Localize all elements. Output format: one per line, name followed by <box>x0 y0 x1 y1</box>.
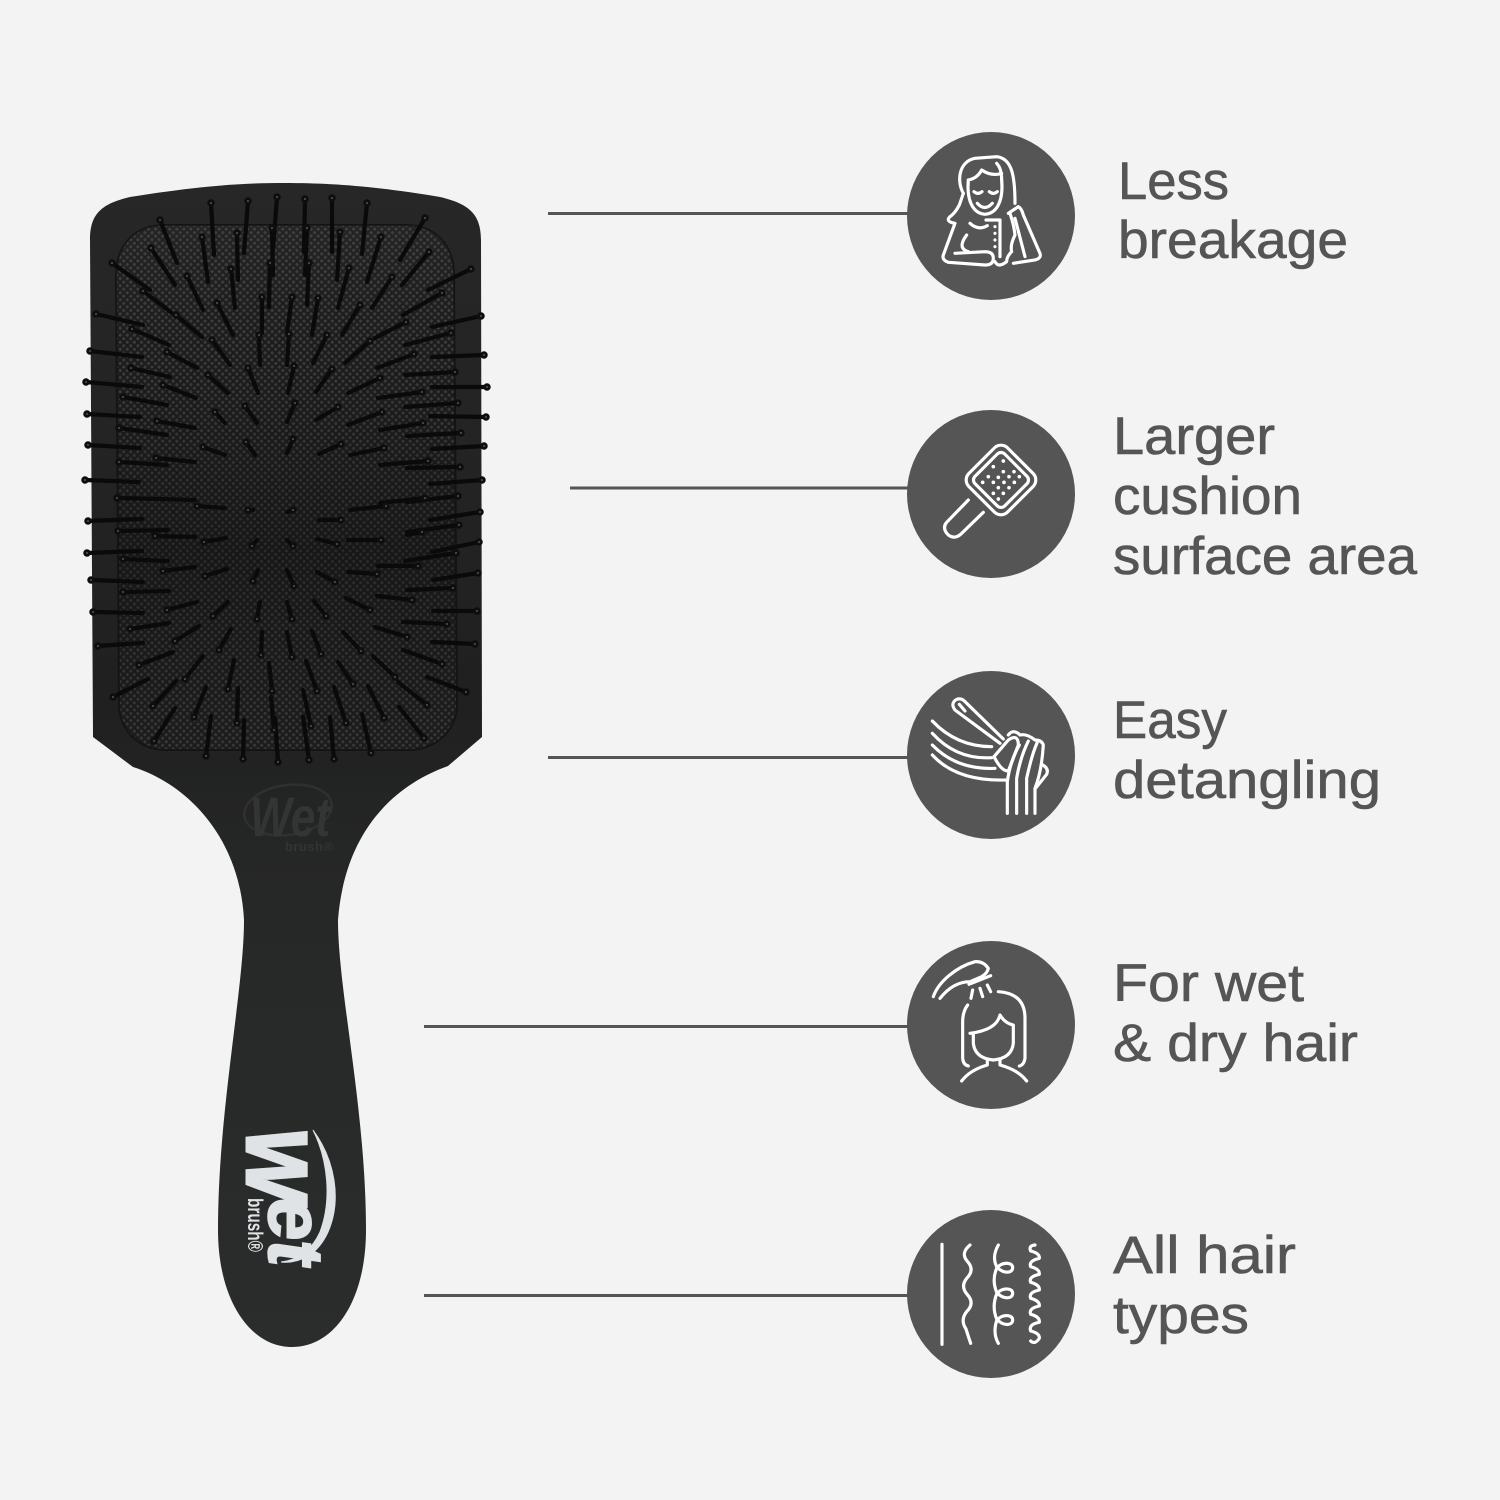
badge icon: paddle brush <box>907 410 1075 578</box>
feature: easy detangling <box>907 671 1381 839</box>
label: Larger <box>1113 407 1275 466</box>
label: & dry hair <box>1113 1014 1358 1073</box>
feature: for wet and dry hair <box>907 941 1358 1109</box>
label: Less <box>1118 152 1229 211</box>
label <box>1113 691 1381 810</box>
callout connector lines <box>424 214 910 1296</box>
white logo on handle: et <box>252 1193 340 1273</box>
badge icon: hair textures <box>907 1210 1075 1378</box>
label: For wet <box>1113 954 1304 1013</box>
feature: less breakage <box>907 132 1348 300</box>
label <box>1113 954 1358 1073</box>
label: breakage <box>1118 211 1348 270</box>
badge icon: woman brushing hair <box>907 132 1075 300</box>
bristle pins <box>85 197 487 762</box>
label <box>1113 407 1418 586</box>
badge icon: brush through hair <box>907 671 1075 839</box>
product: paddle hair brush <box>85 183 487 1347</box>
cushion <box>116 225 457 750</box>
white logo on handle: brush® <box>243 1198 266 1252</box>
label: All hair <box>1113 1226 1296 1285</box>
label: detangling <box>1113 751 1381 810</box>
label: cushion <box>1113 467 1302 526</box>
feature: all hair types <box>907 1210 1296 1378</box>
embossed logo on neck <box>241 779 335 854</box>
label <box>1113 1226 1296 1345</box>
feature: larger cushion surface area <box>907 407 1418 586</box>
white logo on handle <box>228 1121 340 1273</box>
badge icon: shower over head <box>907 941 1075 1109</box>
label <box>1118 152 1348 270</box>
brush body and handle <box>90 183 482 1347</box>
white logo on handle: W <box>228 1121 324 1209</box>
label: surface area <box>1113 527 1418 586</box>
embossed logo on neck: brush® <box>285 839 333 854</box>
embossed logo on neck: Wet <box>250 785 332 848</box>
label: Easy <box>1113 691 1227 750</box>
label: types <box>1113 1286 1249 1345</box>
